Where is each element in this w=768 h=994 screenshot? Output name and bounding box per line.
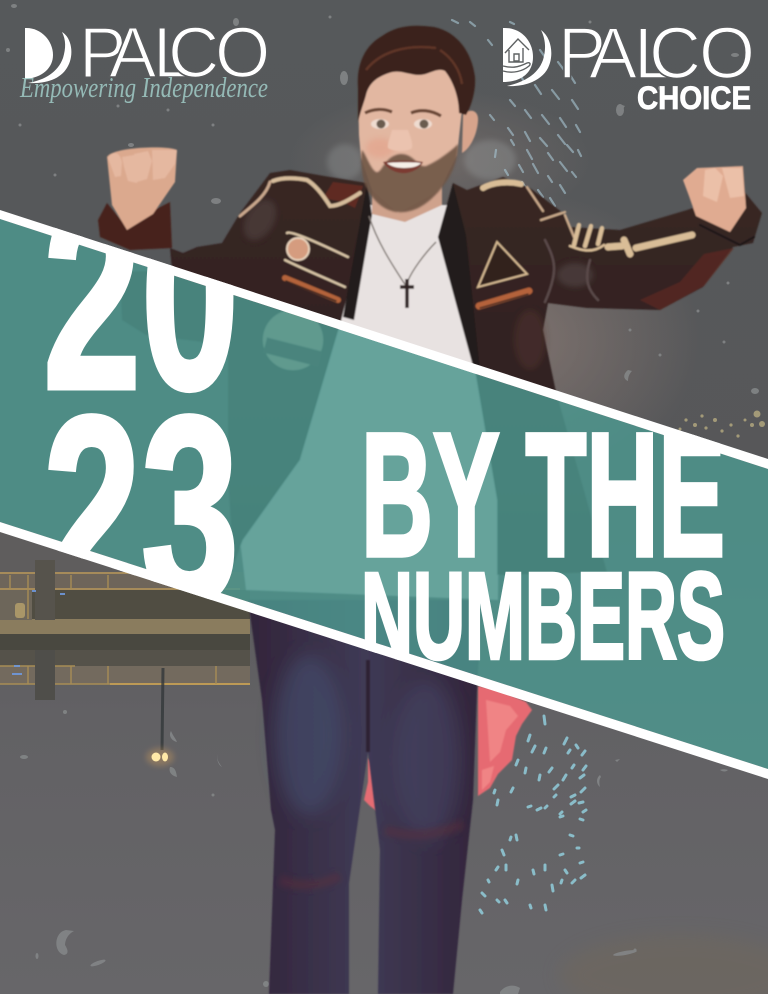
CHOICE: CHOICE — [637, 80, 751, 116]
headline text — [47, 228, 724, 662]
right fist — [683, 166, 746, 232]
pink firework burst — [364, 686, 532, 812]
year top: 20: 20 — [43, 149, 239, 444]
icon: house in D mark — [503, 28, 551, 86]
white bottom rule — [0, 522, 768, 779]
tagline: Empowering Independence — [19, 73, 268, 104]
firework glints right — [678, 410, 765, 438]
jacket trim — [240, 178, 754, 308]
wordmark: PALCO — [79, 14, 270, 93]
dock and its reflection — [0, 530, 250, 700]
white top rule — [0, 210, 768, 469]
year bottom: 23: 23 — [43, 361, 239, 656]
upper firework sparks — [452, 20, 581, 206]
lower firework sparks — [480, 716, 586, 913]
lamp reflection on water — [146, 668, 174, 766]
icon: D crescent mark — [25, 28, 71, 83]
jeans — [248, 600, 482, 994]
wordmark: PALCO — [558, 14, 755, 94]
PALCO Choice logo — [503, 14, 755, 116]
jacket — [120, 170, 762, 575]
head — [358, 26, 478, 222]
cross necklace — [369, 216, 436, 308]
white t-shirt — [240, 205, 500, 600]
PALCO logo — [19, 14, 270, 104]
left cuff and fist — [98, 147, 177, 250]
teal diagonal band — [0, 219, 768, 769]
